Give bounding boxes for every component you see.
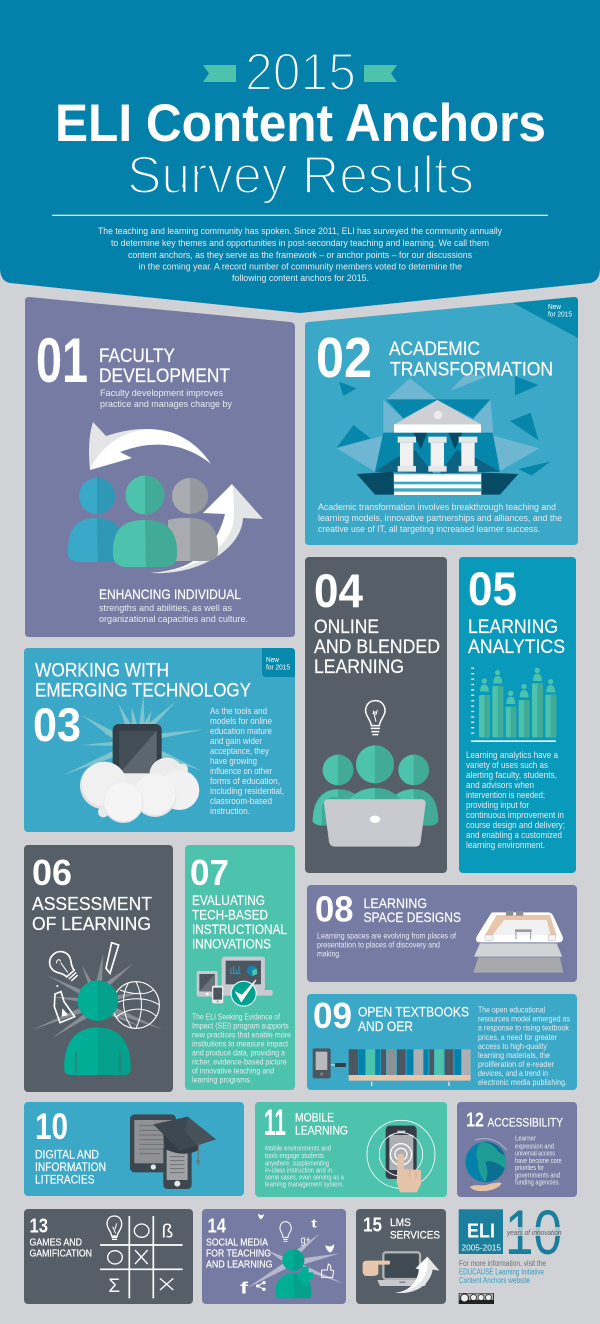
heading: MOBILE [295,1111,334,1125]
number 01: 01 [36,326,88,396]
icon: institution building with shards [337,373,551,495]
heading: AND LEARNING [206,1260,273,1271]
number 09: 09 [313,995,352,1036]
new for 2015 corner [513,297,578,338]
heading: ASSESSMENT [32,893,152,914]
body text: in-class instruction and in [265,1165,332,1174]
body text: models for online [210,716,272,727]
new for 2015 corner: for 2015 [266,662,290,672]
heading [364,895,461,925]
panel: 10 digital and information literacies [24,1102,244,1196]
heading [358,1004,469,1034]
logo: ELI 10 years of innovation: 10 [505,1198,562,1268]
body text [210,706,284,817]
intro text [100,388,232,410]
body text: learning materials, the [478,1050,550,1060]
heading: working with emerging technology [35,660,251,702]
body text [317,930,457,959]
body text: learning programs. [192,1076,252,1085]
title: ELI Content Anchors [55,94,546,153]
heading: academic transformation: ACADEMIC [389,339,480,360]
icon: globe on hand [465,1138,507,1191]
icon: three people [68,476,218,567]
panel: 02 academic transformation [305,297,578,545]
body text [478,1005,570,1087]
heading: INFORMATION [35,1160,106,1174]
intro text: The teaching and learning community has spoken. Since 2011, ELI has surveyed the community annually [98,226,502,236]
heading [35,1147,106,1187]
logo: ELI 10 years of innovation [459,1198,562,1268]
panel: 08 learning space designs [307,885,577,982]
body text: influence on other [210,766,272,777]
heading: OF LEARNING [32,913,151,934]
number 03: 03 [33,699,81,752]
ribbon right [364,65,397,82]
body text: universal access [515,1149,555,1158]
icon: circular arrows [89,422,263,573]
body text: As the tools and [210,706,267,717]
body text: learning environment. [466,840,545,851]
body text: governments and [515,1170,560,1179]
body text: acceptance, they [210,746,269,757]
number 06: 06 [32,852,72,893]
body text: variety of uses such as [466,760,548,771]
body text: including residential, [210,786,284,797]
panel: 01 faculty development [25,297,295,637]
body text [265,1144,345,1189]
heading: TECH-BASED [192,907,268,922]
body text: access to high-quality [478,1041,548,1051]
body text: Impact (SEI) program supports [192,1021,289,1030]
icon: person with social icons: t [311,1216,317,1230]
body text: providing input for [466,800,529,811]
number 08: 08 [315,889,354,930]
number 05: 05 [468,563,517,616]
icon: tablet in cloud [63,695,204,823]
number 15: 15 [363,1215,382,1237]
heading: ANALYTICS [468,637,565,658]
body text: course design and delivery; [466,820,565,831]
heading [32,893,152,934]
icon: tic-tac-toe board [100,1216,183,1298]
body text: Mobile environments and [265,1144,331,1153]
body text: education mature [210,726,272,737]
closing text: organizational capacities and culture. [99,614,248,625]
heading: SPACE DESIGNS [364,909,461,925]
intro text: in the coming year. A record number of community members voted to determine the [138,262,462,272]
body text: funding agencies. [515,1177,560,1186]
bar chart: people on bars [471,668,556,742]
body text: tools engage students [265,1151,324,1160]
intro text: following content anchors for 2015. [232,273,369,283]
panel: 03 emerging technology [24,648,295,832]
body text: alerting faculty, students, [466,770,557,781]
icon: tablet, phone, graduation cap [130,1114,216,1189]
body text: expression and [515,1141,554,1150]
heading: GAMIFICATION [30,1249,92,1260]
body text: devices, and a trend in [478,1068,548,1078]
body text: intervention is needed; [466,790,545,801]
heading: INSTRUCTIONAL [192,922,287,937]
panel: 12 accessibility [457,1102,577,1197]
body text: richer, evidence-based picture [192,1058,287,1067]
body text: classroom-based [210,796,272,807]
icon: person with social icons: g+ [301,1234,311,1246]
heading: ACCESSIBILITY [488,1118,563,1130]
panel: 07 evaluating tech-based innovations [185,845,295,1090]
body text: have growing [210,756,257,767]
body text: and advisors when [466,780,534,791]
heading [314,617,440,678]
heading: LEARNING [314,657,404,678]
number 04: 04 [314,565,364,618]
body text: learning models, innovative partnerships and alliances, and the [318,513,562,524]
intro text: to determine key themes and opportunities in post-secondary teaching and learning. We call them [111,238,489,248]
icon: laptop, hand and arrow [363,1252,439,1293]
heading [30,1238,92,1260]
body text: a response to rising textbook [478,1023,570,1033]
icon: e-reader and bookshelf [313,1048,471,1086]
body text: resources model emerged as [478,1014,570,1024]
panel: 09 open textbooks and OER [307,994,577,1090]
heading: AND BLENDED [314,637,440,658]
closing text [99,586,248,625]
text: more information [459,1259,546,1285]
new for 2015 corner: for 2015 [548,310,572,318]
title: Survey Results [127,146,474,205]
heading [390,1217,440,1242]
body text: The open educational [478,1005,545,1015]
icon: learner with bulb, pencil, flask, globe [32,943,163,1075]
panel: 04 online and blended learning [305,557,447,873]
icon: lightbulb and people at laptop [313,701,438,847]
ribbon left [203,65,236,82]
new for 2015 corner: New [266,655,279,664]
heading: SERVICES [390,1230,440,1242]
heading: LEARNING [295,1123,348,1137]
heading: DIGITAL AND [35,1147,99,1161]
heading: working with emerging technology: EMERGING TECHNOLOGY [35,680,251,702]
logo: ELI 10 years of innovation: 2005-2015 [462,1244,502,1253]
body text: instruction. [210,806,250,817]
body text: making. [317,949,341,959]
heading: LEARNING [468,617,558,638]
body text: and gain wider [210,736,262,747]
heading: LEARNING [364,895,427,911]
text: more information: EDUCAUSE Learning Initiative [459,1268,544,1277]
body text: priorities for [515,1163,544,1172]
heading [295,1111,348,1137]
number 14: 14 [208,1215,227,1237]
heading: working with emerging technology: WORKING WITH [35,660,169,682]
heading [192,893,287,951]
panel: 13 games and gamification [24,1209,193,1304]
body text: proliferation of e-reader [478,1059,554,1069]
panel: 11 mobile learning [255,1102,447,1197]
body text: Learning spaces are evolving from places of [317,930,457,940]
body text: electronic media publishing. [478,1077,567,1087]
panel: header [0,0,600,313]
icon: tic-tac-toe board: Σ [108,1276,120,1297]
heading: academic transformation: TRANSFORMATION [390,360,553,380]
new for 2015 corner: New [548,302,561,311]
body text: creative use of IT, all targeting increased learner success. [318,524,540,535]
closing text: strengths and abilities, as well as [99,603,232,614]
new for 2015 corner [262,648,295,677]
number 07: 07 [190,852,229,893]
panel: 05 learning analytics [459,557,576,873]
heading: faculty development: FACULTY [99,345,175,367]
heading: INNOVATIONS [192,936,271,951]
heading: LITERACIES [35,1173,94,1187]
icon: phone touched by hand [367,1120,435,1192]
heading [206,1238,273,1271]
body text: and enabling a customized [466,830,562,841]
heading [468,617,565,658]
intro text: content anchors, as they serve as the framework – or anchor points – for our discussions [128,250,472,260]
intro text: Faculty development improves [100,388,223,399]
icon: creative commons badge [459,1293,494,1304]
heading: AND OER [358,1018,413,1034]
number 02: 02 [316,326,372,390]
icon: devices with check mark [197,957,273,1007]
body text: anywhere, supplementing [265,1158,329,1167]
body text: new practices that enable more [192,1030,291,1039]
body text: of innovative teaching and [192,1067,274,1076]
body text [192,1012,291,1085]
heading: faculty development: DEVELOPMENT [99,365,230,387]
panel: 15 LMS services [356,1209,446,1304]
icon: stacked classroom floors [473,911,563,973]
body text [318,502,562,535]
text: more information: For more information, visit the [459,1259,546,1268]
heading: GAMES AND [30,1238,82,1249]
text: more information: Content Anchors website [459,1276,530,1285]
icon: person with social icons [240,1213,343,1298]
body text: have become core [515,1156,562,1165]
body text [515,1134,562,1186]
body text: prices, a need for greater [478,1032,557,1042]
panel: 14 social media [202,1209,346,1304]
heading: EVALUATING [192,893,265,908]
logo: ELI 10 years of innovation: ELI [467,1221,495,1243]
body text: and produce data, providing a [192,1049,285,1058]
number 13: 13 [30,1215,48,1237]
body text: institutions to measure impact [192,1040,289,1049]
heading: academic transformation [389,339,553,380]
title: 2015 [245,43,356,102]
closing text: ENHANCING INDIVIDUAL [99,586,241,602]
number 12: 12 [466,1110,484,1132]
panel: 06 assessment of learning [24,845,173,1092]
heading: FOR TEACHING [206,1249,271,1260]
icon: person with social icons: f [240,1278,249,1297]
body text: continuous improvement in [466,810,564,821]
heading: OPEN TEXTBOOKS [358,1004,469,1020]
body text: presentation to places of discovery and [317,940,440,950]
body text: some cases, even serving as a [265,1173,345,1182]
body text: forms of education, [210,776,280,787]
heading: LMS [390,1217,411,1229]
logo: ELI 10 years of innovation: years of innovation [506,1230,562,1237]
body text [466,750,565,851]
heading: ONLINE [314,617,379,638]
number 10: 10 [35,1106,68,1147]
intro text [98,226,502,283]
body text: Academic transformation involves breakthrough teaching and [318,502,556,513]
intro text: practice and manages change by [100,399,232,410]
body text: learning management system. [265,1180,344,1189]
body text: The ELI Seeking Evidence of [192,1012,281,1021]
icon: tic-tac-toe board: ß [162,1222,174,1243]
heading: SOCIAL MEDIA [206,1238,268,1249]
heading: faculty development [99,345,230,387]
title [55,43,546,205]
number 11: 11 [264,1102,286,1143]
body text: Learner [515,1134,536,1143]
body text: Learning analytics have a [466,750,559,761]
